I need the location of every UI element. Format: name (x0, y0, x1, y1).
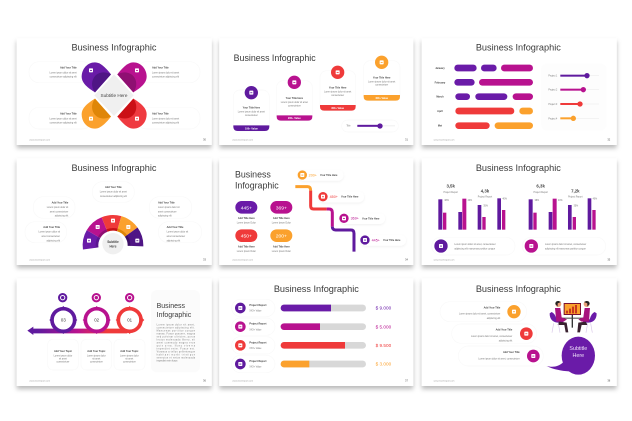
footer (434, 379, 611, 383)
right text panel: habitant morbi tristique (157, 354, 196, 357)
footer: 36 (203, 379, 206, 383)
right text panel: consectetuer adipiscing elit. (157, 327, 195, 330)
speech bubble subtitle: Here (573, 353, 584, 359)
row 4: XXX+ Value (249, 367, 262, 369)
orange petal (82, 99, 111, 129)
footer (29, 257, 206, 261)
text bubble lower right: adipiscing elit (167, 239, 181, 242)
text pill orange: Lorem ipsum dolor sit amet, consectetuer (459, 313, 501, 316)
text card 01: sit amet (125, 357, 134, 360)
card 3: consectetuer (331, 94, 344, 97)
callout 4,3k: Project Report (478, 196, 493, 199)
text bubble top: consectetuer adipiscing elit (100, 195, 127, 198)
text card 03 (48, 339, 78, 370)
text pill top right: Lorem ipsum dolor sit amet (152, 71, 179, 74)
left bar chart: 38% (444, 200, 449, 202)
row 3: $ 9.500 (376, 343, 392, 348)
card 4: 400+ Value (375, 97, 389, 100)
row 2: XXX+ Value (249, 329, 262, 331)
title: Business Infographic (476, 163, 561, 173)
card 2: Your Title Here (286, 97, 304, 100)
row 3: Project Report (249, 341, 267, 344)
text bubble upper right: amet consectetuer (158, 210, 177, 213)
step item 200: Your Title Here (320, 174, 338, 177)
pink petal (117, 62, 147, 92)
card 3: Your Title Here (329, 87, 347, 90)
footer (29, 137, 206, 141)
text bubble lower left: Lorem ipsum dolor sit (38, 231, 60, 234)
center diamond with subtitle (94, 74, 134, 116)
ring 01 (116, 306, 144, 334)
speech bubble subtitle: Subtitle (569, 346, 587, 352)
card 4: consectetuer (375, 84, 388, 87)
right text panel: massa. Fusce posuere, magna (157, 333, 196, 336)
illustration: meeting (550, 301, 597, 333)
left bar chart: 40% (502, 199, 507, 201)
text pill top left (29, 62, 92, 83)
right text panel: lectus malesuada libero, sit (157, 339, 195, 342)
text card 02: sit amet (92, 357, 101, 360)
footer (232, 257, 408, 261)
ring 03: 03 (61, 317, 66, 322)
footer (232, 379, 408, 383)
callout 6,3k (533, 184, 548, 194)
right bar chart: 35% (574, 206, 578, 208)
step item 369 (339, 213, 385, 224)
card 1 (233, 86, 269, 131)
title: Infographic (235, 181, 279, 191)
text pill pink (458, 346, 543, 366)
text bubble top (92, 182, 134, 202)
row 1: $ 9.000 (376, 306, 392, 311)
card 3: 300+ Value (331, 107, 345, 110)
right text panel: Maecenas porttitor congue (157, 330, 196, 333)
title: Business Infographic (274, 284, 359, 294)
text bubble lower right: Lorem ipsum dolor sit (167, 231, 189, 234)
text card 03: Lorem ipsum dolor (54, 354, 73, 357)
right text panel: Lorem ipsum dolor sit amet, (157, 324, 195, 327)
ring 02: 02 (94, 317, 100, 322)
step item 200: 200+ (309, 173, 317, 177)
callout 7,2k (568, 188, 583, 199)
callout 7,2k: 7,2k (571, 188, 580, 193)
text bubble upper left: Add Your Title (52, 201, 69, 204)
text card 02 (81, 339, 112, 370)
left bar chart: 35% (483, 206, 488, 208)
text pill pink: Add Your Title (503, 351, 520, 354)
text bubble upper right: Lorem ipsum dolor sit (158, 206, 180, 209)
project sliders panel: Project 2 (548, 89, 558, 92)
title: Business Infographic (71, 43, 157, 53)
stat 445: Add Title Here (238, 217, 255, 220)
callout 4,3k: 4,3k (481, 188, 490, 193)
card 1: Your Title Here (243, 107, 261, 110)
stat 445: 445+ (241, 205, 252, 211)
callout 4,3k (478, 188, 493, 199)
title: Business Infographic (234, 53, 316, 63)
month labels (435, 67, 446, 128)
text bubble upper left: amet consectetuer (50, 210, 69, 213)
step item 450: 450+ (330, 195, 338, 199)
slide 4: semicircle fan (17, 158, 212, 278)
stat 200: Add Title Here (273, 245, 290, 248)
text bubble lower left (25, 222, 67, 243)
text bubble top: Lorem ipsum dolor sit amet (100, 191, 127, 194)
card 1: Lorem ipsum dolor sit amet (238, 111, 265, 114)
title: Business Infographic (71, 163, 157, 173)
note pill left (432, 237, 515, 255)
right text panel: Business (157, 303, 185, 310)
project sliders panel: Project 1 (548, 75, 558, 78)
month labels: January (435, 67, 445, 70)
fan chart (80, 212, 146, 278)
text bubble lower right: Add Your Title (167, 226, 184, 229)
text bubble upper right (149, 197, 192, 218)
text card 01 (114, 339, 145, 370)
footer: 34 (405, 257, 408, 261)
text bubble lower left: Add Your Title (43, 226, 61, 229)
card 4: Lorem ipsum dolor sit amet (368, 80, 396, 83)
card 2: consectetuer (288, 104, 301, 107)
text pill bottom left (29, 107, 92, 129)
row 4: $ 3.000 (376, 362, 392, 367)
text pill top right (137, 62, 200, 83)
row 2: Project Report (249, 323, 267, 326)
right text panel: imperdiet enim. Fusce est. (157, 348, 195, 351)
step item 200 (298, 170, 343, 181)
stat 445: Lorem Ipsum Dolor (237, 221, 256, 224)
callout 3,5k (443, 184, 458, 194)
footer: 31 (405, 137, 408, 141)
slide 1: four petal diagram (17, 38, 212, 145)
stat 369: Add Title Here (273, 217, 290, 220)
note pill right: adipiscing elit maecenas porttitor congue (545, 248, 587, 251)
stat 445 (235, 201, 257, 224)
project sliders panel (541, 63, 607, 131)
step item 369: 369+ (351, 217, 359, 221)
footer: 38 (607, 379, 611, 383)
project sliders panel: Project 3 (548, 103, 558, 106)
text pill orange: adipiscing elit (487, 317, 501, 320)
ring 03 (49, 306, 77, 334)
right text panel: senectus et netus malesuada (157, 357, 196, 360)
step item 445: Your Title Here (383, 239, 401, 242)
text bubble lower left: amet consectetuer (41, 235, 60, 238)
title: Business Infographic (476, 43, 561, 53)
center subtitle (102, 233, 124, 254)
right text panel: sed pulvinar ultricies, purus (157, 336, 196, 339)
text pill bottom right: Add Your Title (152, 112, 169, 115)
text bubble top: Add Your Title (105, 186, 122, 189)
card 2: 200+ Value (288, 117, 301, 120)
month labels: April (437, 110, 443, 113)
footer: 35 (607, 258, 611, 262)
slide 6: column charts (422, 158, 617, 265)
footer: www.insertreport.com (232, 258, 253, 261)
stat 200: Lorem Ipsum Dolor (272, 250, 291, 253)
small icons (59, 294, 133, 301)
month labels: Mei (438, 125, 442, 128)
footer: www.insertreport.com (434, 380, 455, 383)
text pill bottom right (137, 107, 200, 129)
right text panel: Vivamus a tellus pellentesque (157, 351, 196, 354)
step item 450 (318, 192, 364, 202)
month labels: February (435, 81, 446, 84)
text card 03: sit amet (59, 357, 67, 360)
note pill right (522, 237, 606, 255)
stat 450: 450+ (241, 234, 252, 240)
footer: 37 (405, 379, 408, 383)
row 2 (232, 318, 392, 335)
right bar chart (529, 198, 597, 230)
text card 01: consectetuer (123, 360, 136, 363)
ring 01: 01 (127, 317, 133, 322)
callout 6,3k: 6,3k (536, 184, 545, 189)
footer: www.insertreport.com (29, 258, 50, 261)
text card 02: Lorem ipsum dolor (87, 354, 106, 357)
footer: www.insertreport.com (434, 259, 455, 262)
right bar chart: 40% (593, 199, 597, 201)
title (235, 170, 279, 191)
progress slider (342, 120, 398, 132)
center subtitle: Subtitle (107, 240, 119, 244)
staircase line (295, 187, 354, 252)
text card 03: Add Your Topic (54, 350, 73, 353)
callout 3,5k: 3,5k (446, 184, 455, 189)
step item 445 (360, 235, 406, 246)
stat 450 (235, 229, 257, 253)
callout 3,5k: Project Report (443, 191, 458, 194)
slide 7: ring process (17, 278, 212, 386)
callout 6,3k: Project Report (533, 191, 548, 194)
note pill right: Lorem ipsum dolor sit amet, consectetuer (545, 243, 587, 246)
text pill top left: consectetuer adipiscing elit (50, 76, 77, 79)
right text panel: imperdiet enim fusce. (157, 360, 178, 363)
right text panel: quis urna. Nunc viverra (157, 345, 196, 348)
row 4: Project Report (249, 360, 267, 363)
footer (232, 137, 408, 141)
card 3 (320, 66, 356, 111)
purple petal (82, 62, 111, 92)
text card 02: consectetuer (90, 360, 103, 363)
project sliders panel: Project 4 (548, 117, 558, 120)
step item 450: Your Title Here (341, 196, 359, 199)
text pill bottom left: Lorem ipsum dolor sit amet (50, 117, 77, 120)
text pill top right: Add Your Title (152, 67, 169, 70)
slide 8: progress bars (219, 278, 413, 386)
text bubble upper left (33, 197, 75, 218)
text bubble upper right: Add Your Title (158, 201, 175, 204)
text card 03: consectetuer (57, 360, 70, 363)
stat 369: 369+ (276, 205, 287, 211)
ring 02 (83, 306, 111, 334)
row 3 (232, 337, 392, 354)
stat 200 (270, 229, 292, 253)
footer: www.insertreport.com (232, 380, 253, 383)
text pill orange (440, 302, 527, 322)
step item 445: 445+ (372, 238, 380, 242)
footer (434, 137, 611, 141)
row 3: XXX+ Value (249, 348, 262, 350)
text pill top left: Lorem ipsum dolor sit amet (50, 71, 77, 74)
stat 369 (270, 201, 292, 224)
right text panel: amet commodo magna eros (157, 342, 196, 345)
text pill red: Lorem ipsum dolor sit amet, consectetuer (471, 335, 513, 338)
stat 450: Add Title Here (238, 245, 255, 248)
footer: 32 (607, 137, 611, 141)
center diamond with subtitle: Subtitle Here (101, 93, 128, 98)
card 1: consectetuer (245, 114, 258, 117)
note pill left: Lorem ipsum dolor sit amet, consectetuer (454, 243, 496, 246)
left bar chart: 40% (468, 200, 472, 202)
row 1: XXX+ Value (249, 311, 262, 313)
stat 369: Lorem Ipsum Dolor (272, 221, 291, 224)
right text panel (151, 290, 200, 372)
card 3: Lorem ipsum dolor sit amet (324, 91, 352, 94)
text card 02: Add Your Topic (87, 350, 106, 353)
row 2: $ 5.000 (376, 324, 392, 329)
footer: 33 (203, 257, 206, 261)
text pill red: Add Your Title (496, 329, 513, 332)
text card 01: Add Your Topic (120, 350, 139, 353)
footer (434, 258, 611, 262)
row 1 (232, 299, 392, 317)
text bubble upper left: adipiscing elit (55, 215, 69, 218)
text pill red: adipiscing elit (499, 339, 513, 342)
text pill orange: Add Your Title (484, 307, 501, 310)
card 4: Your Title Here (373, 76, 391, 79)
footer: www.insertreport.com (434, 138, 455, 141)
slide 9: meeting illustration (422, 278, 617, 386)
right bar chart: 40% (558, 200, 563, 202)
footer: www.insertreport.com (232, 138, 253, 141)
card 1: 100+ Value (245, 127, 258, 130)
text pill red (452, 324, 537, 343)
card 2: Lorem ipsum dolor sit amet (281, 101, 308, 104)
footer: www.insertreport.com (29, 138, 50, 141)
stat 200: 200+ (276, 234, 287, 240)
speech bubble subtitle (546, 337, 595, 375)
text pill top left: Add Your Title (60, 67, 77, 70)
text bubble lower left: adipiscing elit (46, 239, 60, 242)
text bubble upper right: adipiscing elit (158, 215, 172, 218)
progress slider: Title (346, 125, 351, 128)
text pill top right: consectetuer adipiscing elit (152, 76, 179, 79)
slide 5: staircase (219, 158, 413, 265)
red petal (117, 99, 147, 129)
text bubble lower right: amet consectetuer (167, 235, 185, 238)
text pill pink: Lorem ipsum dolor sit amet, consectetuer (478, 358, 520, 361)
note pill left: adipiscing elit maecenas porttitor congue (454, 248, 496, 251)
slide 2: rising cards (219, 38, 413, 145)
arrow band (27, 327, 127, 335)
card 2 (277, 76, 312, 121)
text bubble upper left: Lorem ipsum dolor sit (47, 206, 69, 209)
text pill bottom left: consectetuer adipiscing elit (50, 122, 77, 125)
left bar chart (438, 198, 507, 230)
footer (29, 379, 206, 383)
footer: 30 (203, 137, 206, 141)
text pill bottom left: Add Your Title (60, 112, 77, 115)
month labels: March (436, 96, 444, 99)
text pill bottom right: consectetuer adipiscing elit (152, 122, 179, 125)
right bar chart: 38% (535, 200, 539, 202)
row 4 (232, 355, 392, 373)
card 4 (364, 56, 400, 101)
stat 450: Lorem Ipsum Dolor (237, 250, 256, 253)
text bubble lower right (158, 222, 202, 243)
center subtitle: Here (109, 244, 117, 248)
row 1: Project Report (249, 304, 267, 307)
callout 7,2k: Project Report (568, 196, 583, 199)
gantt bars (454, 65, 533, 129)
text pill bottom right: Lorem ipsum dolor sit amet (152, 117, 179, 120)
title: Business Infographic (476, 284, 561, 294)
footer: www.insertreport.com (29, 380, 50, 383)
right text panel: Infographic (157, 312, 192, 319)
slide 3: gantt bars (422, 38, 617, 145)
text card 01: Lorem ipsum dolor (120, 354, 139, 357)
title: Business (235, 170, 271, 180)
step item 369: Your Title Here (362, 217, 380, 220)
